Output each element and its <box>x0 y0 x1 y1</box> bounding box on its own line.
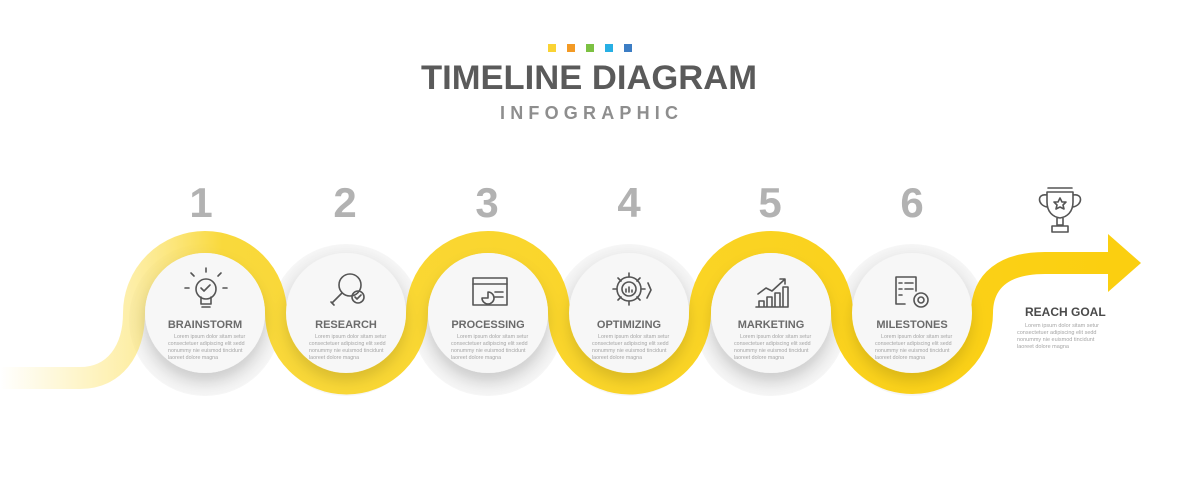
icon: bar chart <box>756 279 788 307</box>
step descriptions <box>168 334 952 361</box>
icons <box>185 188 1080 307</box>
step descriptions: consectetuer adipiscing elit sedd <box>309 341 386 347</box>
step labels: MARKETING <box>738 319 804 331</box>
step labels: BRAINSTORM <box>168 319 242 331</box>
step descriptions: nonummy nie euismod tincidunt <box>168 348 243 354</box>
icon: gear <box>613 273 651 305</box>
step descriptions: nonummy nie euismod tincidunt <box>451 348 526 354</box>
reach goal text: laoreet dolore magna <box>1017 344 1070 350</box>
step descriptions: consectetuer adipiscing elit sedd <box>451 341 528 347</box>
step descriptions: laoreet dolore magna <box>592 355 642 361</box>
step descriptions: nonummy nie euismod tincidunt <box>875 348 950 354</box>
step numbers <box>189 179 924 226</box>
icon: checklist <box>896 277 928 307</box>
reach goal text <box>1017 323 1099 350</box>
reach goal text: nonummy nie euismod tincidunt <box>1017 337 1095 343</box>
yellow snake path with arrow <box>0 234 1141 384</box>
step labels: RESEARCH <box>315 319 377 331</box>
step descriptions: laoreet dolore magna <box>734 355 784 361</box>
step labels <box>168 319 948 331</box>
subtitle: INFOGRAPHIC <box>500 103 678 123</box>
step numbers: 3 <box>475 179 499 226</box>
step numbers: 4 <box>617 179 641 226</box>
reach goal text: Lorem ipsum dolor sitam setur <box>1025 323 1099 329</box>
step descriptions: nonummy nie euismod tincidunt <box>734 348 809 354</box>
step descriptions: laoreet dolore magna <box>168 355 218 361</box>
step descriptions: nonummy nie euismod tincidunt <box>592 348 667 354</box>
step descriptions: nonummy nie euismod tincidunt <box>309 348 384 354</box>
reach goal text: consectetuer adipiscing elit sedd <box>1017 330 1096 336</box>
step descriptions: Lorem ipsum dolor sitam setur <box>457 334 528 340</box>
step descriptions: Lorem ipsum dolor sitam setur <box>315 334 386 340</box>
step numbers: 1 <box>189 179 213 226</box>
halos <box>129 244 988 396</box>
step descriptions: Lorem ipsum dolor sitam setur <box>598 334 669 340</box>
title: TIMELINE DIAGRAM <box>421 59 757 97</box>
white circles <box>145 253 972 373</box>
step descriptions: Lorem ipsum dolor sitam setur <box>881 334 952 340</box>
step labels: OPTIMIZING <box>597 319 661 331</box>
icon: bulb <box>185 268 227 307</box>
step descriptions: consectetuer adipiscing elit sedd <box>168 341 245 347</box>
step descriptions: Lorem ipsum dolor sitam setur <box>740 334 811 340</box>
step descriptions: laoreet dolore magna <box>875 355 925 361</box>
step descriptions: Lorem ipsum dolor sitam setur <box>174 334 245 340</box>
icon: trophy <box>1040 188 1080 232</box>
step labels: MILESTONES <box>876 319 948 331</box>
step descriptions: laoreet dolore magna <box>309 355 359 361</box>
step numbers: 2 <box>333 179 357 226</box>
step descriptions: consectetuer adipiscing elit sedd <box>592 341 669 347</box>
reach goal heading: REACH GOAL <box>1025 305 1106 319</box>
step descriptions: consectetuer adipiscing elit sedd <box>875 341 952 347</box>
step descriptions: laoreet dolore magna <box>451 355 501 361</box>
icon: browser chart <box>473 278 507 305</box>
color dots <box>548 44 632 52</box>
step numbers: 5 <box>758 179 782 226</box>
icon: magnifier <box>331 274 364 305</box>
step descriptions: consectetuer adipiscing elit sedd <box>734 341 811 347</box>
step labels: PROCESSING <box>451 319 525 331</box>
step numbers: 6 <box>900 179 924 226</box>
